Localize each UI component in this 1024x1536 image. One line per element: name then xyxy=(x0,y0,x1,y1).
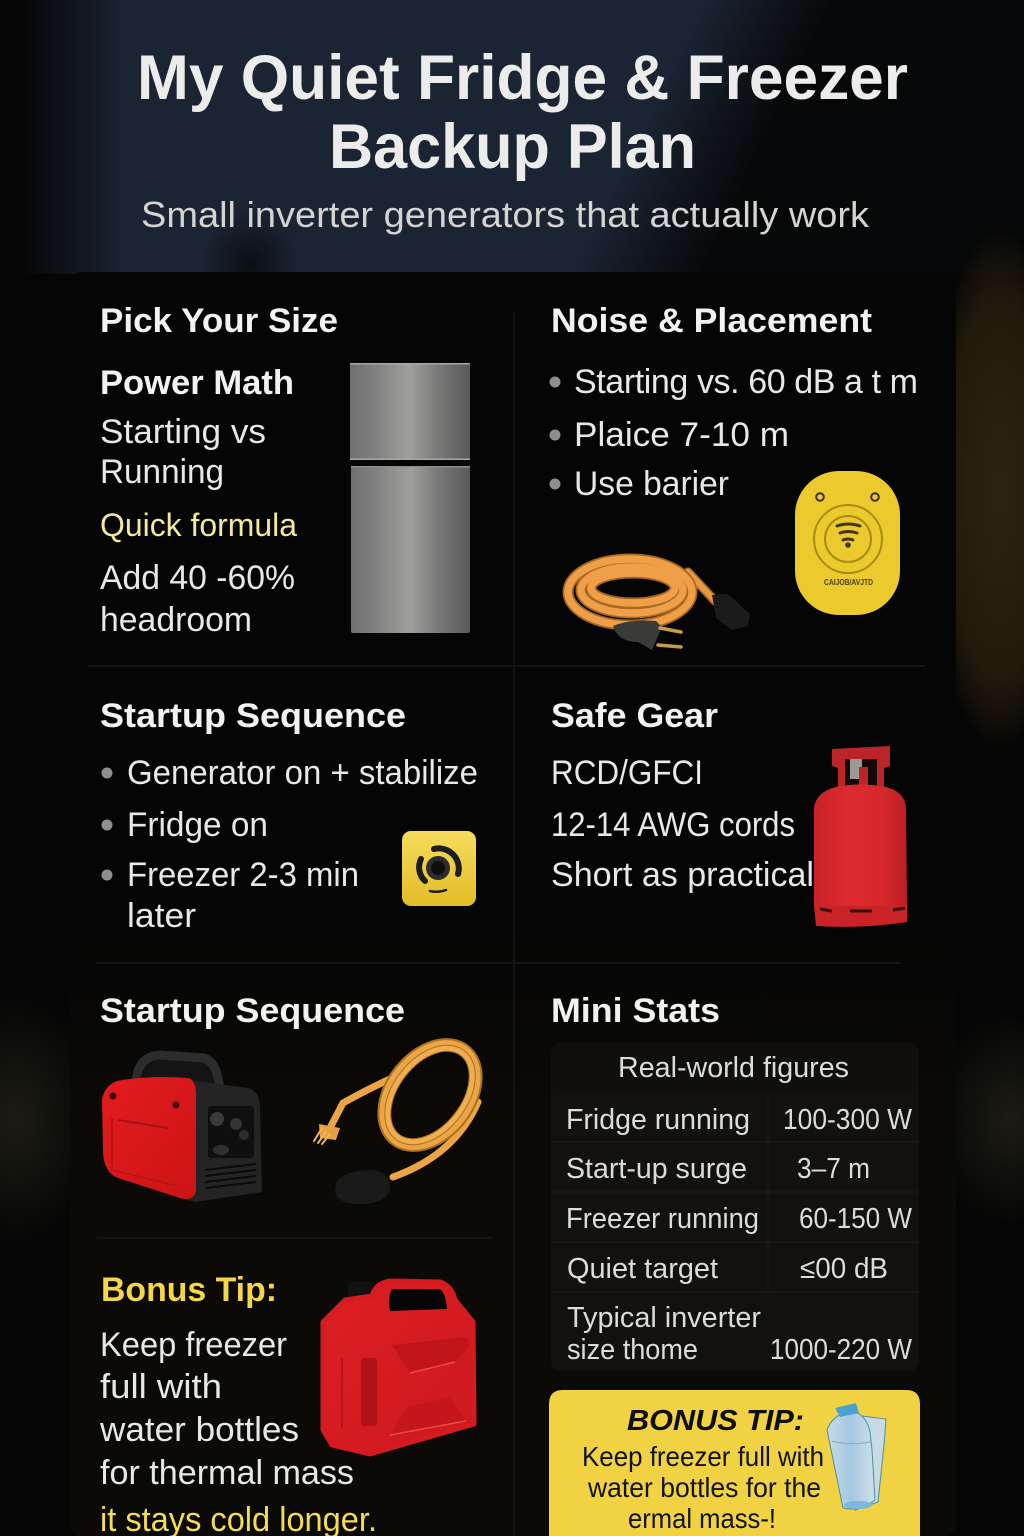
list: noise tips: Starting vs. 60 dB a t m xyxy=(574,363,918,401)
list: startup steps: Fridge on xyxy=(127,806,268,844)
table: real-world figures: Quiet target xyxy=(567,1253,718,1285)
title: Backup Plan xyxy=(329,112,696,182)
panel: safe gear xyxy=(551,697,907,927)
text block: power math: Running xyxy=(100,453,224,491)
text block: freezer tip xyxy=(99,1326,377,1536)
callout: bonus tip: Keep freezer full with xyxy=(582,1441,824,1472)
table: real-world figures: Typical inverter xyxy=(567,1302,761,1334)
table: real-world figures: Fridge running xyxy=(566,1104,750,1136)
dividers xyxy=(88,312,925,1536)
panel: mini stats xyxy=(551,992,919,1371)
icon: yellow sound sensor: CAIJOB/AVJTD xyxy=(824,578,873,587)
table: real-world figures: 100-300 W xyxy=(783,1104,913,1136)
heading: startup sequence repeat: Startup Sequence xyxy=(100,992,405,1030)
heading: noise and placement: Noise & Placement xyxy=(551,302,872,340)
icon: fridge xyxy=(350,363,470,634)
panel: noise and placement xyxy=(550,302,918,650)
icon: yellow sound sensor xyxy=(795,471,900,615)
table: real-world figures: Freezer running xyxy=(566,1203,759,1235)
text block: freezer tip: water bottles xyxy=(99,1411,299,1449)
text block: power math: headroom xyxy=(100,601,252,639)
subtitle: Small inverter generators that actually work xyxy=(141,194,870,235)
panel: startup sequence xyxy=(100,697,478,935)
callout: bonus tip: water bottles for the xyxy=(587,1472,821,1503)
table: real-world figures: 60-150 W xyxy=(799,1203,913,1235)
text block: power math xyxy=(100,364,297,639)
heading: bonus tip: Bonus Tip: xyxy=(101,1271,277,1309)
table: real-world figures xyxy=(551,1043,919,1371)
table: real-world figures: ≤00 dB xyxy=(800,1253,888,1285)
heading: safe gear: Safe Gear xyxy=(551,697,718,735)
list: startup steps: Freezer 2-3 min xyxy=(127,856,359,894)
list: noise tips: Plaice 7-10 m xyxy=(574,416,789,454)
table: real-world figures: 3–7 m xyxy=(797,1153,870,1185)
list: noise tips: Use barier xyxy=(574,465,729,503)
callout: bonus tip xyxy=(549,1390,920,1536)
panel: pick your size xyxy=(100,302,470,639)
table: real-world figures: Start-up surge xyxy=(566,1153,747,1185)
text block: freezer tip: Keep freezer xyxy=(100,1326,287,1364)
list: startup steps: later xyxy=(127,897,196,935)
text block: gear list: Short as practical xyxy=(551,856,814,894)
heading: mini stats: Mini Stats xyxy=(551,992,720,1030)
callout: bonus tip: ermal mass-! xyxy=(628,1503,776,1534)
table: real-world figures: 1000-220 W xyxy=(770,1334,913,1366)
callout: bonus tip: BONUS TIP: xyxy=(627,1405,804,1437)
text block: power math: Add 40 -60% xyxy=(100,559,295,597)
text block: power math: Power Math xyxy=(100,364,294,402)
text block: freezer tip: full with xyxy=(100,1368,222,1406)
text block: power math: Quick formula xyxy=(100,507,297,543)
heading: pick your size: Pick Your Size xyxy=(100,302,338,340)
icon: red gas cylinder xyxy=(814,746,907,927)
icon: red jerry can xyxy=(323,1281,474,1454)
icon: yellow app badge xyxy=(402,831,476,906)
text block: freezer tip: for thermal mass xyxy=(100,1454,354,1492)
panel: bonus tip left xyxy=(99,1271,474,1536)
list: noise tips xyxy=(550,363,918,503)
panel: startup gear xyxy=(100,992,497,1204)
table: real-world figures: size thome xyxy=(567,1334,698,1366)
text block: gear list: RCD/GFCI xyxy=(551,754,703,792)
icon: orange extension cord xyxy=(568,559,750,650)
title xyxy=(137,43,908,182)
icon: orange cord with power strip xyxy=(314,1025,497,1204)
icon: red inverter generator xyxy=(102,1055,262,1202)
list: startup steps xyxy=(102,754,478,935)
list: startup steps: Generator on + stabilize xyxy=(127,754,478,792)
text block: gear list: 12-14 AWG cords xyxy=(551,806,795,844)
icon: water bottles xyxy=(827,1403,886,1510)
text block: gear list xyxy=(551,754,814,894)
title: My Quiet Fridge & Freezer xyxy=(137,43,908,113)
table: real-world figures: Real-world figures xyxy=(618,1052,849,1084)
text block: power math: Starting vs xyxy=(100,413,266,451)
heading: startup sequence: Startup Sequence xyxy=(100,697,406,735)
